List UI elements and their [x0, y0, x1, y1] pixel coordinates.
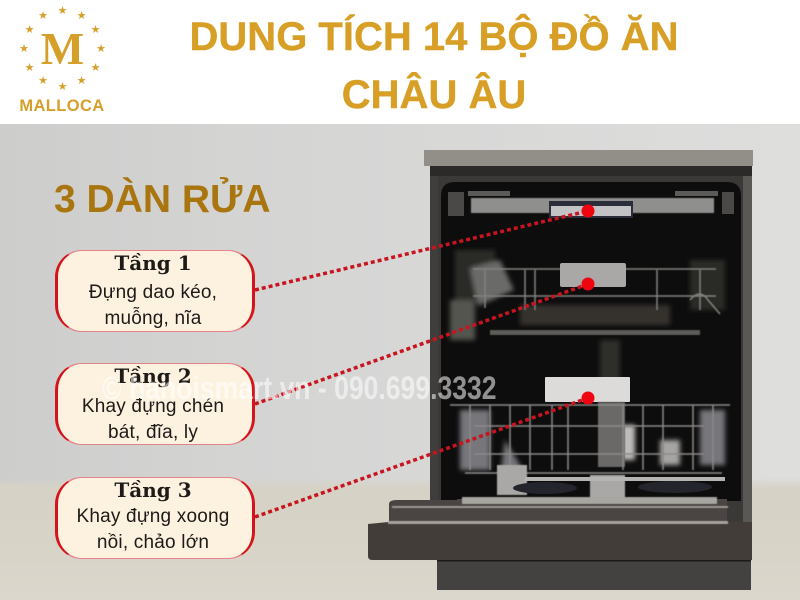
middle label [560, 263, 626, 287]
logo: Malloca [19, 4, 106, 115]
logo: Malloca: ★ [25, 23, 35, 36]
header title [190, 14, 678, 117]
logo: Malloca: ★ [77, 74, 87, 87]
logo: Malloca: ★ [25, 61, 35, 74]
card: Tầng 2: Tầng 2 [114, 364, 192, 388]
cabinet body [430, 166, 752, 526]
card: Tầng 2: Khay đựng chén [82, 396, 224, 417]
logo: Malloca: MALLOCA [19, 97, 105, 115]
lower label [545, 377, 630, 402]
card: Tầng 2: bát, đĩa, ly [108, 422, 198, 443]
spray arms [497, 465, 625, 500]
logo: Malloca: ★ [38, 74, 48, 87]
top worktop [424, 150, 753, 166]
logo: Malloca: ★ [96, 42, 106, 55]
card: Tầng 1: Đựng dao kéo, [89, 282, 217, 303]
logo: Malloca: ★ [91, 23, 101, 36]
logo: Malloca: ★ [58, 80, 68, 93]
card: Tầng 1: Tầng 1 [114, 251, 192, 275]
base plinth [437, 561, 751, 590]
logo: Malloca: ★ [77, 9, 87, 22]
logo: Malloca: ★ [91, 61, 101, 74]
upper rack [473, 269, 720, 333]
interior [441, 182, 741, 501]
watermark: © hanoismart.vn - 090.699.3332 [102, 370, 497, 406]
header title: DUNG TÍCH 14 BỘ ĐỒ ĂN [190, 15, 678, 59]
upper spray arm [471, 198, 714, 213]
logo: Malloca: M [41, 23, 84, 74]
floor [0, 478, 800, 600]
card: Tầng 3: nồi, chảo lớn [97, 532, 209, 553]
card: Tầng 1 [55, 250, 255, 332]
card: Tầng 3: Tầng 3 [114, 478, 192, 502]
lower rack [450, 405, 730, 473]
open door [389, 499, 727, 522]
upper spray label [549, 201, 633, 218]
heading: 3 dàn rửa: 3 DÀN RỬA [54, 178, 271, 221]
card: Tầng 3: Khay đựng xoong [76, 506, 230, 527]
logo: Malloca: ★ [19, 42, 29, 55]
card: Tầng 3 [55, 477, 255, 559]
background scene [0, 124, 800, 600]
logo: Malloca: ★ [58, 4, 68, 17]
card: Tầng 1: muỗng, nĩa [104, 308, 202, 329]
header title: CHÂU ÂU [342, 73, 526, 117]
logo: Malloca: ★ [38, 9, 48, 22]
card: Tầng 2 [55, 363, 255, 445]
